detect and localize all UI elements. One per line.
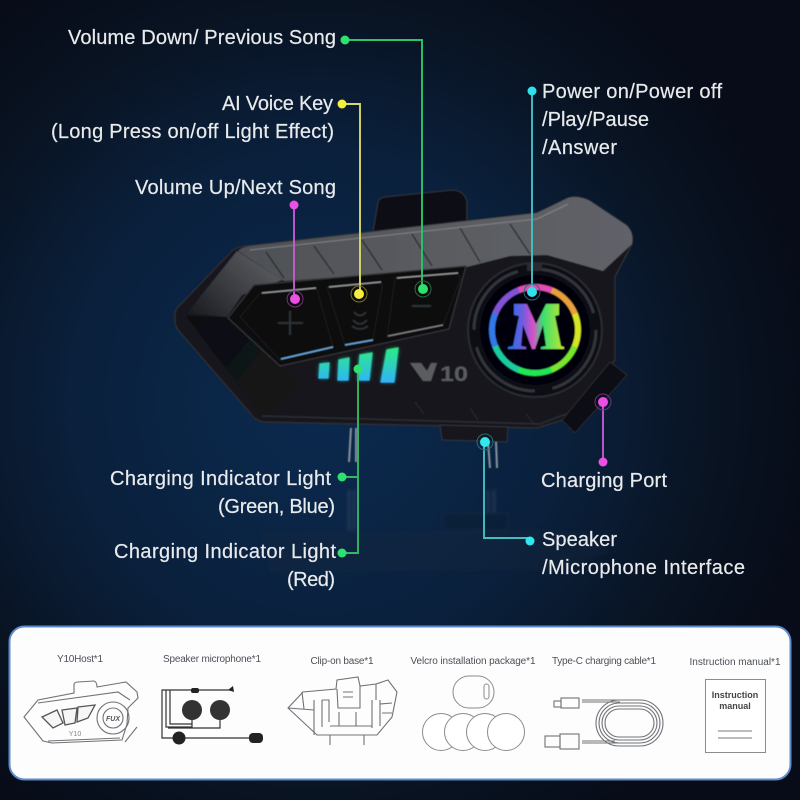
item: instruction manual: Instruction	[712, 690, 758, 700]
callout: Charging Indicator Light (Green, Blue) and (Red): (Green, Blue)	[218, 496, 335, 518]
callout: Volume Up / Next Song: Volume Up/Next Song	[135, 177, 336, 199]
rainbow ring	[479, 274, 591, 386]
device: Y10 headset host	[175, 190, 632, 468]
mount block and pins	[349, 425, 508, 468]
Y10 logo	[410, 363, 468, 386]
device body	[175, 197, 632, 428]
item: Type-C charging cable: Type-C charging cable*1	[552, 656, 656, 667]
item: Y10 host: FUX	[106, 716, 121, 723]
callout: Volume Down / Previous Song: Volume Down/ Previous Song	[68, 27, 336, 49]
clip bracket behind device	[373, 190, 467, 232]
lower left dark face	[186, 316, 300, 416]
device reflection	[260, 490, 610, 572]
item: Type-C charging cable	[545, 656, 663, 749]
callout: AI Voice Key: AI Voice Key	[222, 93, 333, 115]
Y10 logo: 10	[440, 363, 468, 386]
callout: Charging Port	[541, 394, 667, 492]
item: Y10 host	[24, 654, 138, 743]
callout: Power on/off, Play/Pause, Answer	[524, 81, 722, 300]
button: plus	[240, 288, 333, 360]
lower trim	[262, 414, 566, 424]
callout: Volume Up / Next Song	[135, 177, 336, 307]
button: minus	[387, 273, 460, 337]
callout: AI Voice Key: (Long Press on/off Light Effect)	[51, 121, 334, 143]
callout: Speaker / Microphone Interface: /Microphone Interface	[542, 557, 745, 579]
callout: Charging Indicator Light (Green, Blue) and (Red): Charging Indicator Light	[114, 541, 336, 563]
item: Y10 host: Y10Host*1	[57, 654, 103, 665]
callout: Power on/off, Play/Pause, Answer: /Answer	[542, 137, 617, 159]
callout: Volume Down / Previous Song	[68, 27, 431, 297]
callout: AI Voice Key	[51, 93, 367, 302]
left slanted edge	[187, 251, 282, 317]
callout: Power on/off, Play/Pause, Answer: Power on/Power off	[542, 81, 722, 103]
item: clip-on base	[288, 656, 397, 745]
callout: Speaker / Microphone Interface	[477, 434, 745, 579]
bevel seams	[266, 224, 530, 278]
callout: Charging Indicator Light (Green, Blue) and (Red)	[110, 364, 362, 591]
callout: Speaker / Microphone Interface: Speaker	[542, 529, 617, 551]
panel: package contents	[10, 626, 790, 780]
charging port flap	[562, 362, 627, 433]
callout: Charging Port: Charging Port	[541, 470, 667, 492]
item: Y10 host: Y10	[69, 731, 81, 738]
power dial	[468, 263, 602, 397]
indicator bars	[319, 348, 398, 382]
M logo	[508, 304, 564, 349]
item: velcro installation package: Velcro installation package*1	[410, 656, 536, 667]
item: speaker microphone: Speaker microphone*1	[163, 654, 261, 665]
item: instruction manual: Instruction manual*1	[690, 657, 781, 668]
item: instruction manual	[690, 657, 781, 752]
item: instruction manual: manual	[719, 701, 751, 711]
button: AI voice mic	[327, 282, 382, 345]
callout: Power on/off, Play/Pause, Answer: /Play/Pause	[542, 109, 649, 131]
item: clip-on base: Clip-on base*1	[310, 656, 374, 667]
top bevel panel	[238, 197, 632, 281]
callout: Charging Indicator Light (Green, Blue) and (Red): (Red)	[287, 569, 335, 591]
item: velcro installation package	[410, 656, 536, 750]
callout: Charging Indicator Light (Green, Blue) and (Red): Charging Indicator Light	[110, 468, 331, 490]
item: speaker microphone	[162, 654, 263, 744]
button cluster recess	[228, 266, 466, 366]
